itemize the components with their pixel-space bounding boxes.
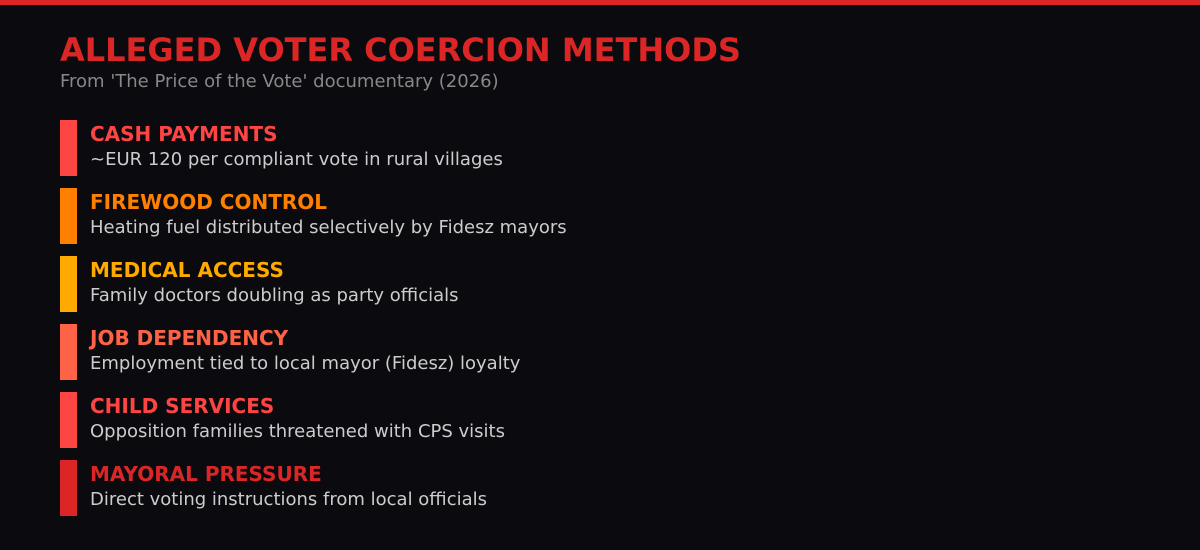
- item: cash payments: CASH PAYMENTS: [90, 122, 277, 146]
- item: medical access: Family doctors doubling as party officials: [90, 285, 459, 306]
- item: job dependency: Employment tied to local mayor (Fidesz) loyalty: [90, 353, 521, 374]
- item: job dependency: JOB DEPENDENCY: [88, 326, 289, 350]
- subtitle: From 'The Price of the Vote' documentary (2026): [60, 71, 499, 92]
- title: ALLEGED VOTER COERCION METHODS: [60, 31, 741, 69]
- item: medical access: MEDICAL ACCESS: [90, 258, 284, 282]
- item: firewood control: [60, 188, 567, 244]
- item: mayoral pressure: [60, 460, 487, 516]
- item: mayoral pressure: Direct voting instructions from local officials: [90, 489, 487, 510]
- item: firewood control: Heating fuel distributed selectively by Fidesz mayors: [90, 217, 567, 238]
- item: job dependency: [60, 324, 521, 380]
- item: child services: [60, 392, 505, 448]
- item: child services: Opposition families threatened with CPS visits: [90, 421, 505, 442]
- item: cash payments: ~EUR 120 per compliant vote in rural villages: [90, 149, 503, 170]
- item: medical access: [60, 256, 459, 312]
- item: mayoral pressure: MAYORAL PRESSURE: [90, 462, 322, 486]
- item: child services: CHILD SERVICES: [90, 394, 274, 418]
- item: firewood control: FIREWOOD CONTROL: [90, 190, 327, 214]
- item: cash payments: [60, 120, 503, 176]
